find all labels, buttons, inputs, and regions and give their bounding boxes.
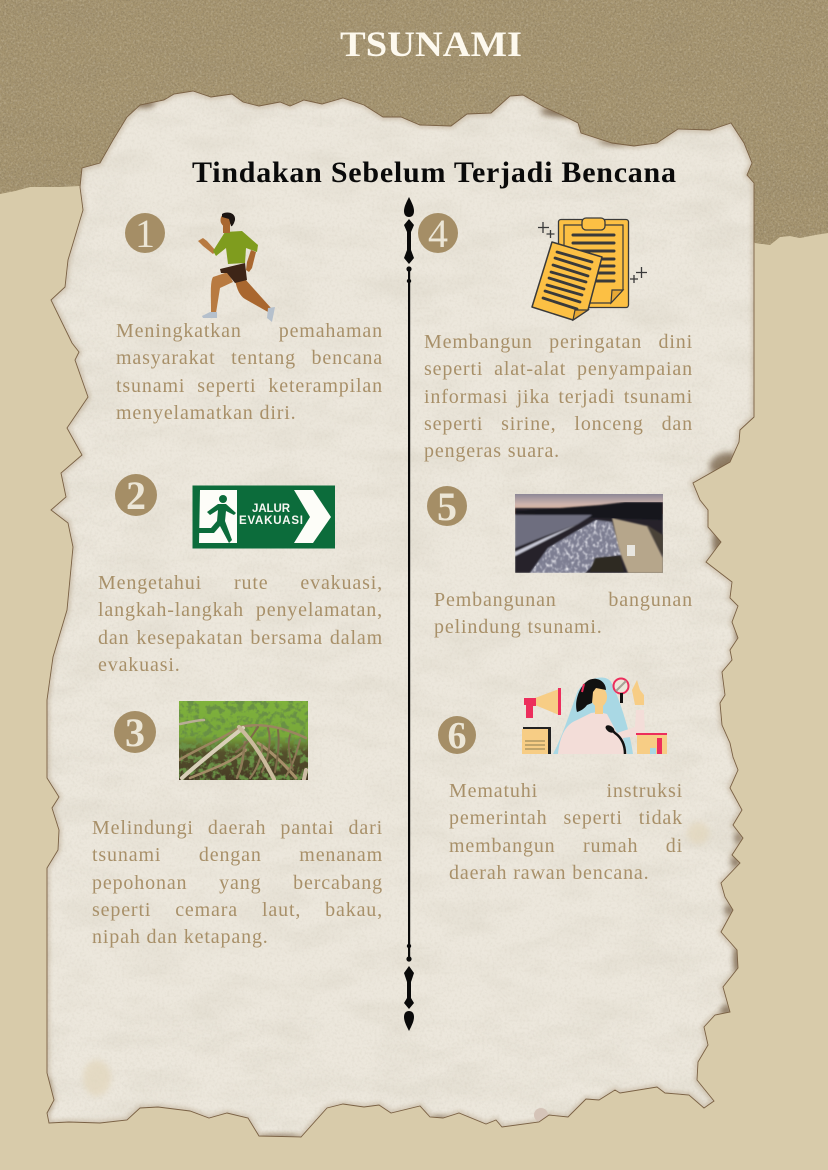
- photo: mangrove roots: [179, 701, 308, 780]
- badge 3: 3: [125, 710, 145, 755]
- text 1: tsunami seperti keterampilan: [116, 375, 383, 397]
- text 3: tsunami dengan menanam: [92, 844, 383, 866]
- text 1: menyelamatkan diri.: [116, 402, 297, 424]
- badge 1: [125, 213, 165, 253]
- icon: running man: [198, 212, 275, 322]
- text 3: Melindungi daerah pantai dari: [92, 817, 383, 839]
- badge 2: [115, 474, 157, 516]
- icon: evacuation route sign: JALUR: [252, 503, 291, 515]
- badge 6: 6: [448, 715, 466, 757]
- text 4: pengeras suara.: [424, 440, 560, 462]
- divider: ornamental vertical spine: [404, 197, 414, 1031]
- text 2: Mengetahui rute evakuasi,: [98, 572, 383, 594]
- text 5: pelindung tsunami.: [434, 616, 603, 638]
- text 6: [449, 780, 683, 884]
- text 6: pemerintah seperti tidak: [449, 807, 683, 829]
- step 5: [427, 484, 693, 638]
- title: TSUNAMI: [340, 24, 522, 64]
- text 1: masyarakat tentang bencana: [116, 347, 383, 369]
- text 5: [434, 589, 693, 638]
- text 3: nipah dan ketapang.: [92, 926, 269, 948]
- icon: evacuation route sign: [192, 486, 335, 548]
- step 4: [418, 211, 693, 462]
- badge 6: [438, 716, 476, 754]
- badge 1: 1: [135, 211, 155, 256]
- illustration: woman giving instructions: [522, 678, 667, 754]
- heading: Tindakan Sebelum Terjadi Bencana: [192, 156, 676, 189]
- text 1: Meningkatkan pemahaman: [116, 320, 383, 342]
- text 4: seperti sirine, lonceng dan: [424, 413, 693, 435]
- text 1: [116, 320, 383, 424]
- text 4: seperti alat-alat penyampaian: [424, 358, 693, 380]
- badge 3: [114, 711, 156, 753]
- text 3: [92, 817, 383, 948]
- text 3: seperti cemara laut, bakau,: [92, 899, 383, 921]
- badge 2: 2: [126, 473, 146, 518]
- icon: evacuation route sign: EVAKUASI: [239, 515, 303, 527]
- step 6: [438, 678, 683, 884]
- text 4: informasi jika terjadi tsunami: [424, 386, 693, 408]
- text 5: Pembangunan bangunan: [434, 589, 693, 611]
- photo: tsunami seawall: [515, 494, 663, 573]
- icon: clipboard and documents: [531, 217, 647, 322]
- text 6: Mematuhi instruksi: [449, 780, 683, 802]
- text 2: dan kesepakatan bersama dalam: [98, 627, 383, 649]
- badge 5: [427, 486, 467, 526]
- text 3: pepohonan yang bercabang: [92, 872, 383, 894]
- text 2: evakuasi.: [98, 654, 181, 676]
- text 2: [98, 572, 383, 676]
- badge 4: 4: [428, 211, 448, 256]
- text 4: [424, 331, 693, 462]
- step 3: [92, 701, 383, 948]
- text 2: langkah-langkah penyelamatan,: [98, 599, 383, 621]
- step 2: [98, 473, 383, 676]
- text 4: Membangun peringatan dini: [424, 331, 693, 353]
- step 1: [116, 211, 383, 424]
- text 6: membangun rumah di: [449, 835, 683, 857]
- badge 4: [418, 213, 458, 253]
- badge 5: 5: [437, 484, 457, 529]
- text 6: daerah rawan bencana.: [449, 862, 650, 884]
